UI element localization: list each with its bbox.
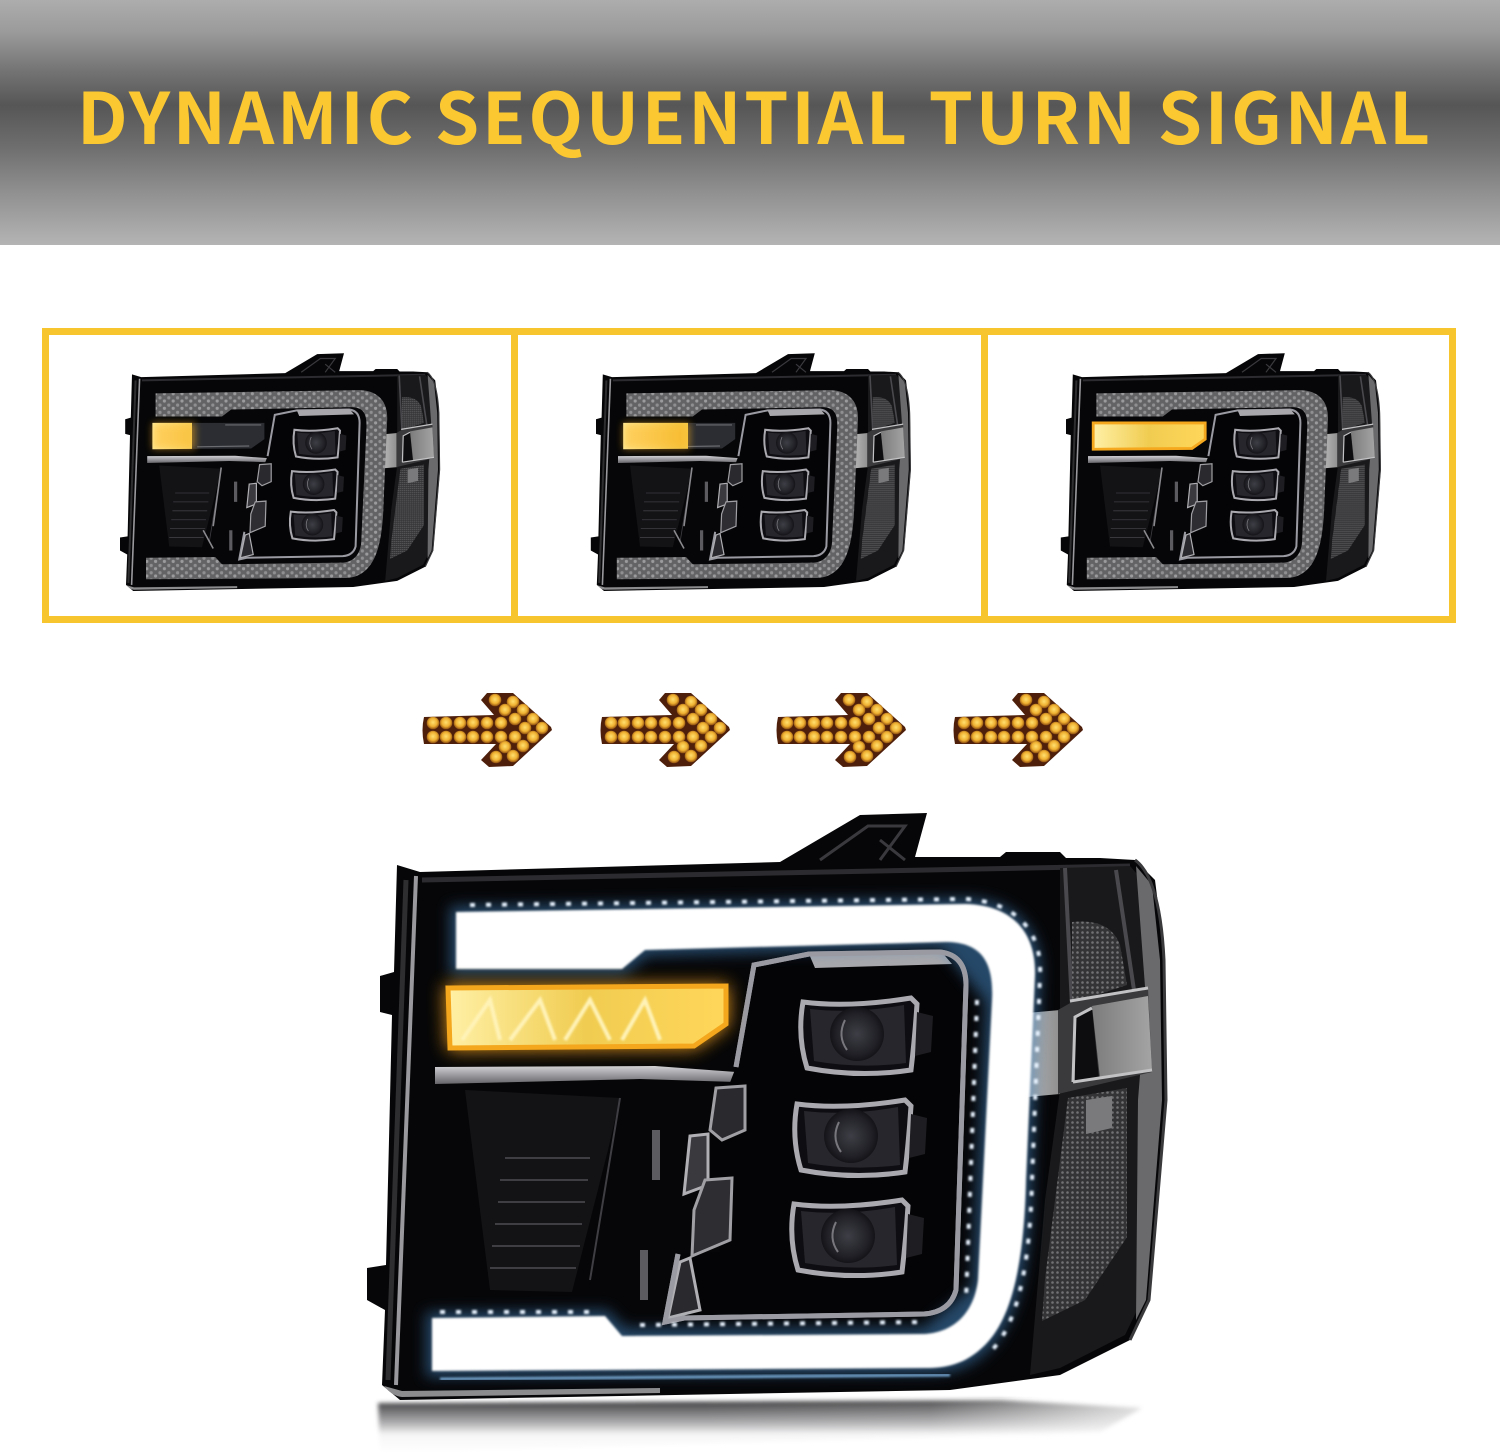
- title: DYNAMIC SEQUENTIAL TURN SIGNAL: [77, 63, 1430, 165]
- bottom blue light line: [440, 1375, 950, 1379]
- arrows row: [422, 693, 1083, 767]
- headlight step 3: [1061, 353, 1381, 591]
- panel: sequence frames: [46, 331, 1452, 620]
- yellow frame: [46, 331, 1452, 620]
- turn signal glow: [445, 985, 728, 1050]
- daytime running light tube: [432, 904, 1035, 1371]
- main headlight illuminated: [367, 813, 1167, 1453]
- arrow 2: [600, 693, 730, 767]
- arrow 4: [954, 693, 1083, 767]
- turn signal: [448, 986, 726, 1048]
- arrow 1: [422, 693, 552, 767]
- running light led dots: [440, 899, 1040, 1350]
- headlight step 1: [120, 353, 440, 591]
- headlight housing: [367, 813, 1167, 1400]
- arrow 3: [776, 693, 906, 767]
- daytime running light glow: [432, 904, 1035, 1371]
- inner chrome frame: [665, 952, 966, 1322]
- headlight step 2: [591, 353, 911, 591]
- header banner: [0, 0, 1500, 245]
- reflection: [378, 1398, 1160, 1453]
